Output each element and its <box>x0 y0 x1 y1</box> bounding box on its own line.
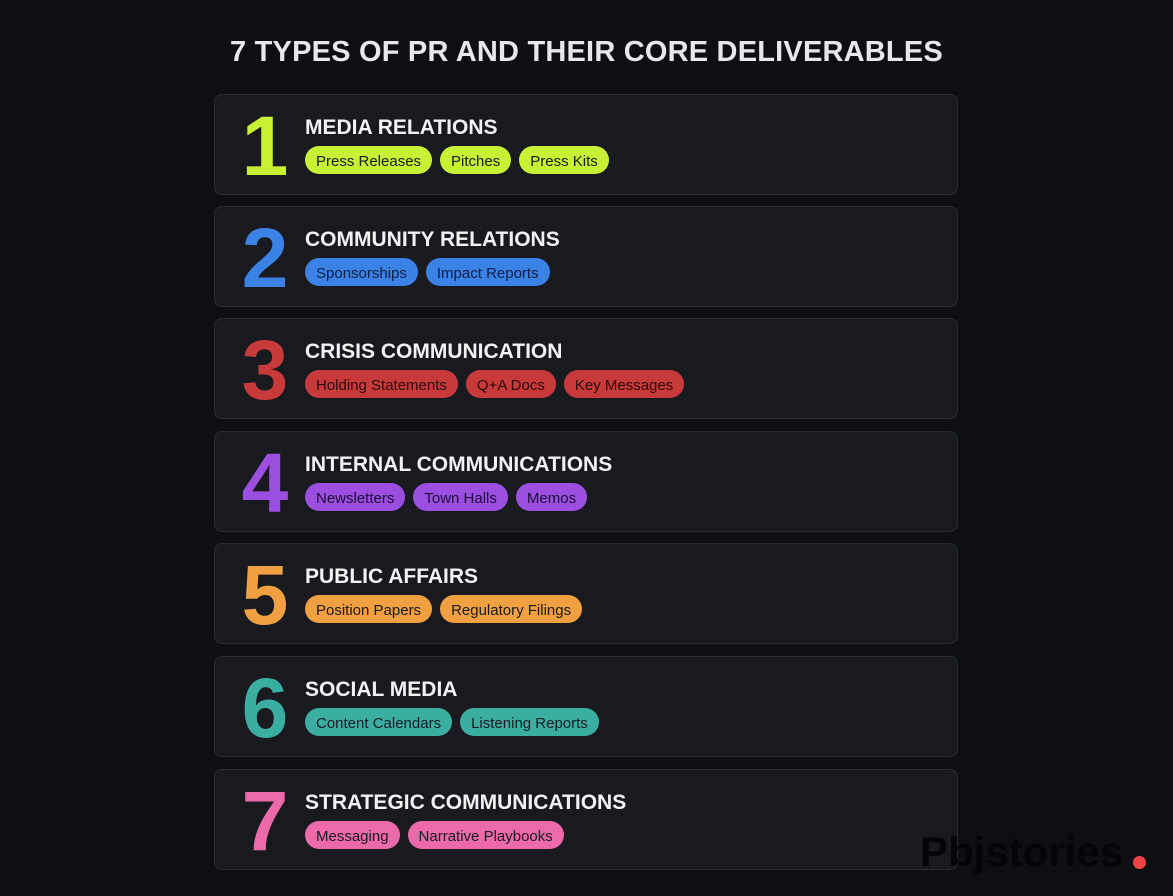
watermark: Pbjstories <box>920 828 1123 875</box>
card 1: media relations: Pitches <box>451 153 500 170</box>
card 4: internal communications: Memos <box>527 490 576 507</box>
card 2: community relations: COMMUNITY RELATIONS <box>305 228 560 251</box>
title: 7 TYPES OF PR AND THEIR CORE DELIVERABLES <box>230 36 943 68</box>
card 7: strategic communications: Messaging <box>316 828 389 845</box>
card 7: strategic communications <box>214 769 958 870</box>
card 1: media relations <box>214 94 958 195</box>
card 6: social media <box>214 656 958 757</box>
card 3: crisis communication: Q+A Docs <box>477 377 545 394</box>
card 3: crisis communication: Holding Statements <box>316 377 447 394</box>
card 1: media relations: MEDIA RELATIONS <box>305 116 498 139</box>
card 6: social media: SOCIAL MEDIA <box>305 678 457 701</box>
card 3: crisis communication: CRISIS COMMUNICATION <box>305 340 562 363</box>
card 6: social media: Content Calendars <box>316 715 441 732</box>
card 6: social media: 6 <box>242 661 288 755</box>
card 1: media relations: Press Releases <box>316 153 421 170</box>
card 3: crisis communication: Key Messages <box>575 377 673 394</box>
card 4: internal communications <box>214 431 958 532</box>
card 5: public affairs: Regulatory Filings <box>451 602 571 619</box>
card 7: strategic communications: Narrative Playbooks <box>419 828 553 845</box>
card 4: internal communications: Town Halls <box>424 490 497 507</box>
card 5: public affairs <box>214 543 958 644</box>
card 2: community relations <box>214 206 958 307</box>
card 7: strategic communications: STRATEGIC COMMUNICATIONS <box>305 791 626 814</box>
card 2: community relations: 2 <box>242 211 288 305</box>
card 1: media relations: 1 <box>242 99 288 193</box>
card 2: community relations: Sponsorships <box>316 265 407 282</box>
card 5: public affairs: PUBLIC AFFAIRS <box>305 565 478 588</box>
card 3: crisis communication <box>214 318 958 419</box>
card 1: media relations: Press Kits <box>530 153 598 170</box>
card 7: strategic communications: 7 <box>242 774 288 868</box>
card 3: crisis communication: 3 <box>242 323 288 417</box>
card 6: social media: Listening Reports <box>471 715 588 732</box>
icon: red dot <box>1133 856 1146 869</box>
card 5: public affairs: 5 <box>242 548 288 642</box>
card 4: internal communications: 4 <box>242 436 288 530</box>
card 5: public affairs: Position Papers <box>316 602 421 619</box>
card 4: internal communications: INTERNAL COMMUNICATIONS <box>305 453 612 476</box>
card 2: community relations: Impact Reports <box>437 265 539 282</box>
card 4: internal communications: Newsletters <box>316 490 394 507</box>
